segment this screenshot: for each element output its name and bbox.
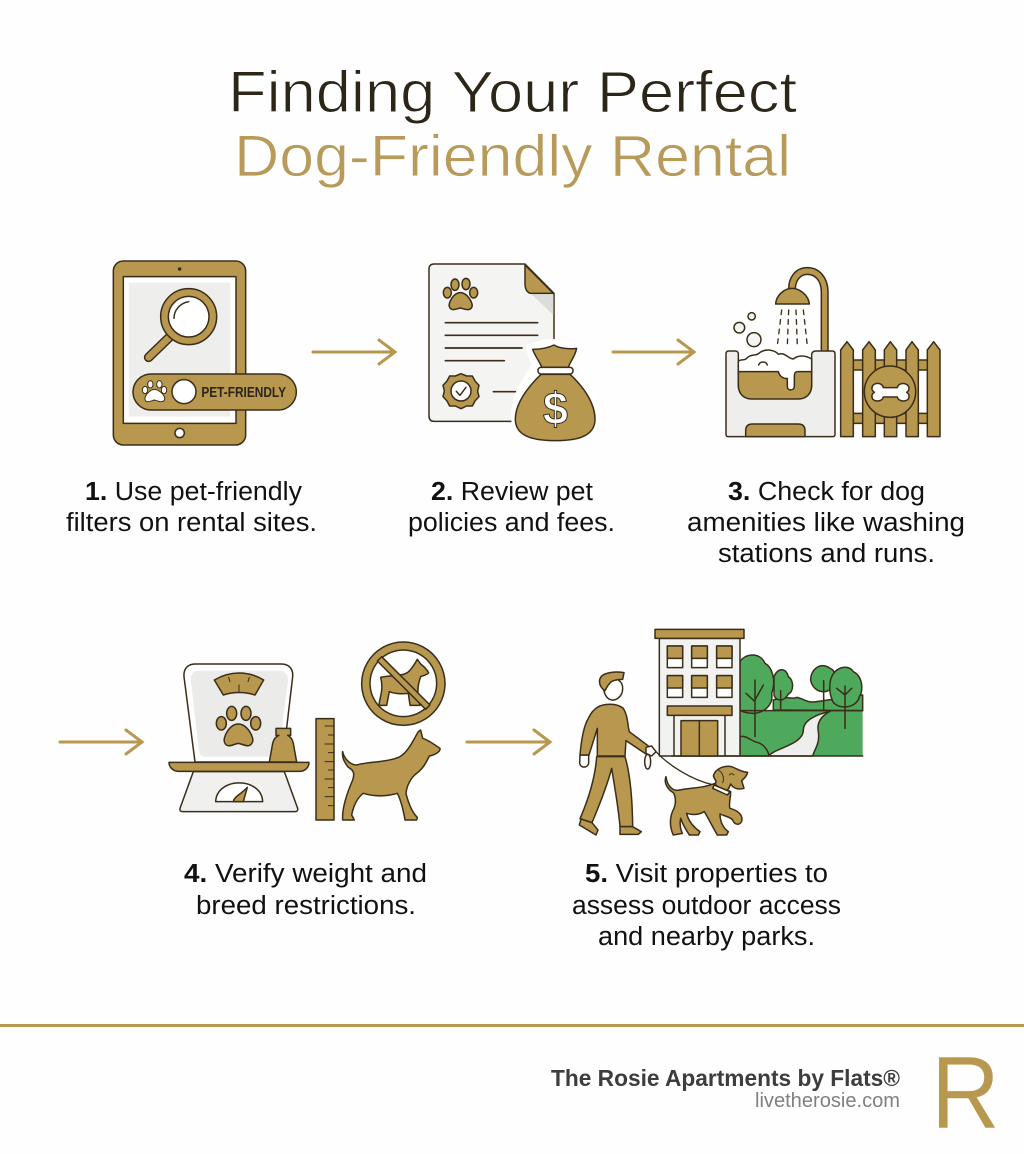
step 4 text: [184, 860, 427, 920]
leash: [656, 752, 714, 785]
no-dog sign: [362, 642, 445, 725]
icon: scale, ruler, dog and breed restriction: [169, 642, 445, 820]
icon: tablet with search and pet-friendly filter: PET-FRIENDLY: [201, 385, 286, 401]
shower: [776, 268, 828, 352]
arrow: step 2 to 3: [613, 340, 694, 364]
footer brand text: livetherosie.com: [755, 1090, 900, 1112]
arrow: into step 4: [60, 730, 142, 754]
paw on document: [443, 278, 478, 310]
step 1 text: filters on rental sites.: [66, 509, 317, 537]
step 1 text: 1. Use pet-friendly: [85, 478, 302, 506]
footer brand text: [551, 1065, 900, 1112]
step 5 text: and nearby parks.: [598, 923, 815, 951]
icon: tablet with search and pet-friendly filter: [113, 261, 296, 445]
seal: [443, 374, 479, 409]
title: Dog-Friendly Rental: [234, 124, 791, 189]
step 2 text: [408, 478, 615, 537]
icon: person walking dog by apartment and park: [579, 629, 863, 835]
icon: pet policy document and money bag: [429, 264, 600, 441]
step 3 text: [687, 478, 965, 568]
step 5 text: 5. Visit properties to: [585, 860, 828, 888]
park: [740, 655, 863, 756]
step 4 text: breed restrictions.: [196, 892, 416, 920]
step 2 text: 2. Review pet: [431, 478, 593, 506]
fence: [841, 342, 940, 437]
icon: pet policy document and money bag: $: [543, 383, 568, 434]
step 5 text: assess outdoor access: [572, 892, 841, 920]
step 1 text: [66, 478, 317, 537]
step 2 text: policies and fees.: [408, 509, 615, 537]
arrow: step 4 to 5: [467, 730, 550, 754]
tub: [726, 351, 835, 437]
bubbles: [734, 313, 761, 347]
arrow: step 1 to 2: [313, 340, 395, 364]
icon: dog wash station and fenced run: [726, 268, 940, 437]
step 5 text: [572, 860, 841, 951]
scale: [169, 664, 309, 812]
dog silhouette: [342, 730, 440, 820]
title: [228, 60, 797, 189]
logo: R: R: [931, 1035, 1000, 1150]
walking dog: [665, 766, 748, 835]
step 3 text: amenities like washing: [687, 509, 965, 537]
ruler: [316, 719, 334, 820]
title: Finding Your Perfect: [228, 60, 797, 125]
step 4 text: 4. Verify weight and: [184, 860, 427, 888]
person: [579, 672, 656, 835]
footer brand text: The Rosie Apartments by Flats®: [551, 1065, 900, 1091]
step 3 text: 3. Check for dog: [728, 478, 925, 506]
apartment building: [655, 629, 863, 756]
step 3 text: stations and runs.: [718, 540, 935, 568]
